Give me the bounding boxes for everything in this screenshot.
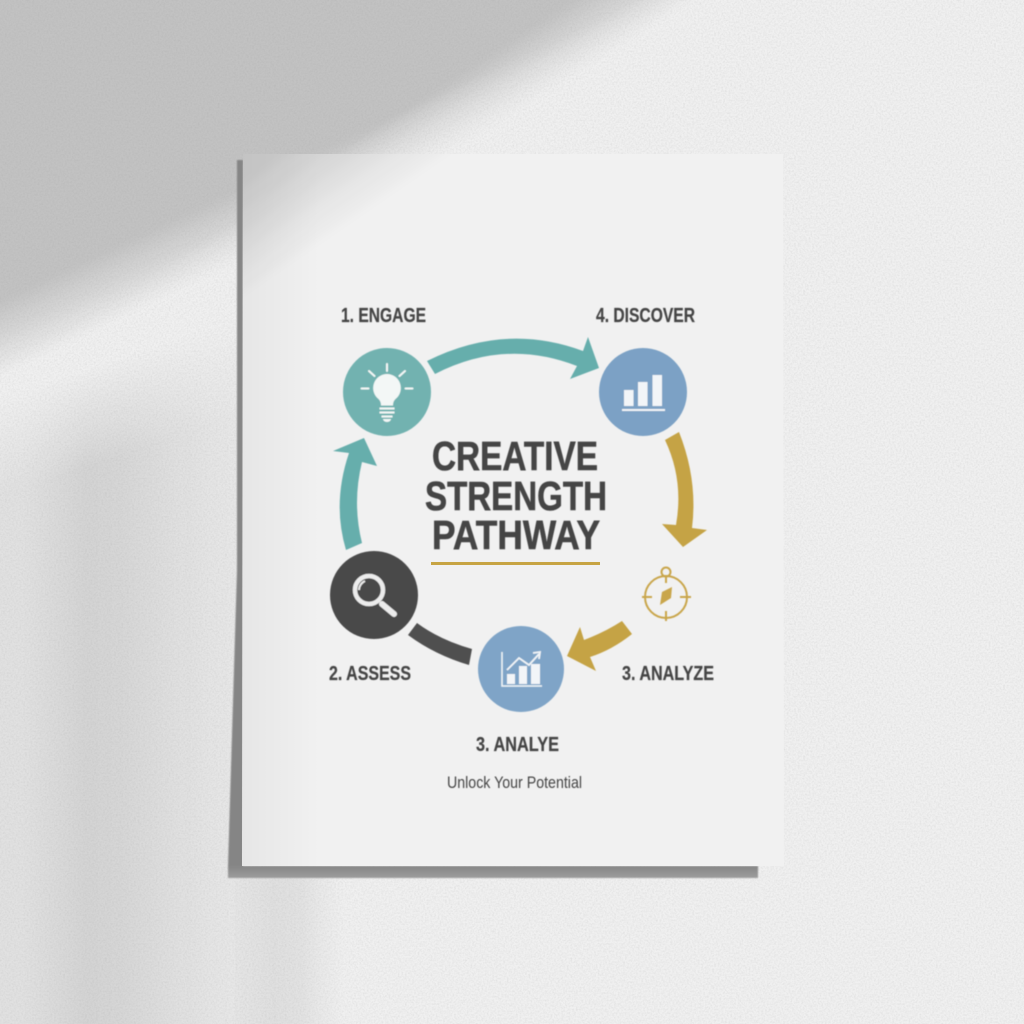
title: PATHWAY	[432, 512, 600, 558]
title: CREATIVE	[432, 433, 598, 479]
title: STRENGTH	[425, 473, 607, 519]
icon: lightbulb in teal circle	[343, 348, 431, 436]
icon: magnifier in dark circle	[330, 551, 418, 639]
label: engage: 1. ENGAGE	[341, 305, 426, 327]
arrow: connector assess to analyze	[408, 623, 472, 665]
arrow: engage to discover	[427, 337, 599, 379]
arrow: discover to compass	[662, 432, 707, 547]
process cycle diagram	[330, 337, 707, 712]
arrow: compass to analyze	[567, 621, 632, 671]
icon: compass	[642, 568, 691, 621]
title underline	[431, 562, 600, 565]
paper sheet	[242, 154, 784, 866]
step labels	[329, 305, 714, 756]
title	[425, 433, 607, 558]
label: analyze: 3. ANALYZE	[622, 663, 714, 685]
icon: bar chart in blue circle	[599, 348, 687, 436]
tagline: Unlock Your Potential	[447, 774, 582, 792]
arrow: assess to engage	[333, 438, 377, 550]
label: discover: 4. DISCOVER	[596, 305, 695, 327]
label: assess: 2. ASSESS	[329, 663, 411, 685]
paper cast shadow	[228, 160, 758, 878]
icon: growth chart in blue circle	[478, 626, 564, 712]
label: analye: 3. ANALYE	[476, 734, 559, 756]
